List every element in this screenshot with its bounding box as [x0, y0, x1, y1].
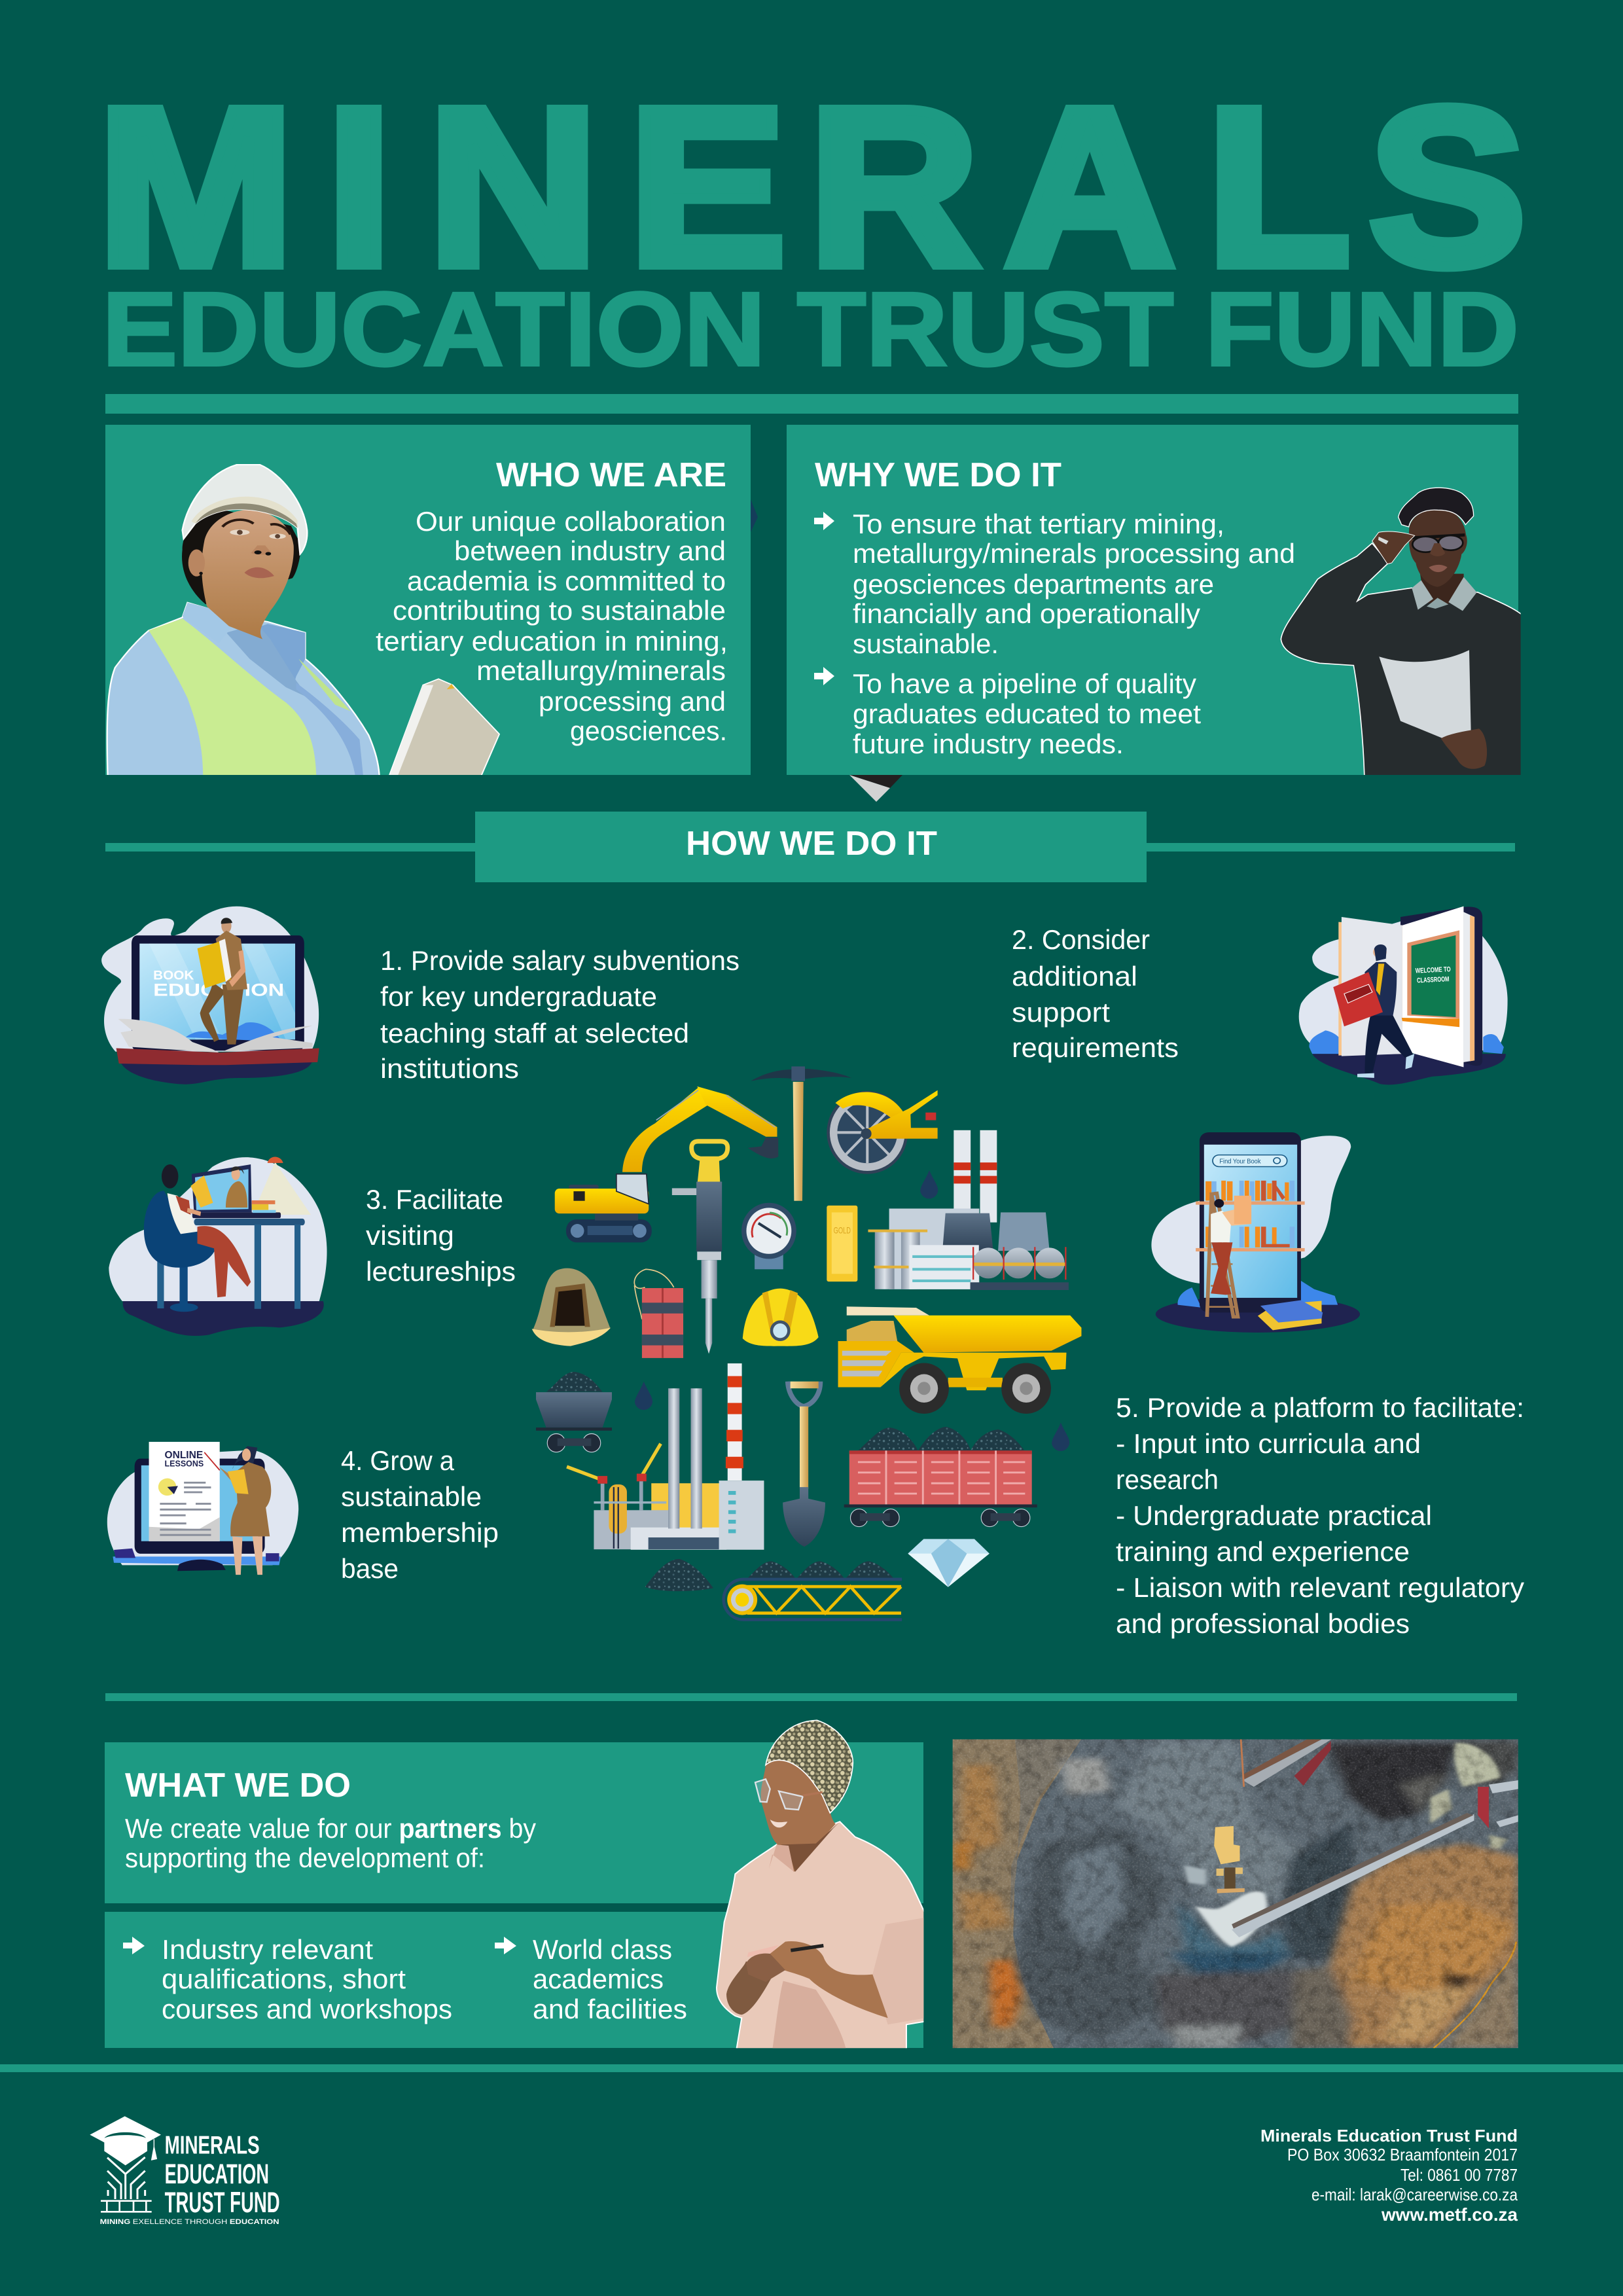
- divider: [105, 1693, 1517, 1701]
- photo: woman in hard hat: [107, 465, 499, 779]
- icon: arrow bullet: [814, 512, 834, 530]
- logo: minerals education trust fund: TRUST FUND: [165, 2187, 280, 2219]
- logo: minerals education trust fund: MINING EXELLENCE THROUGH EDUCATION: [100, 2218, 279, 2226]
- icon: arrow bullet: [814, 667, 834, 685]
- text: who we are body: geosciences.: [570, 715, 727, 746]
- text: step 2: [1012, 924, 1179, 1063]
- illustration: opening book classroom: WELCOME TO: [1415, 966, 1451, 975]
- logo: minerals education trust fund: EDUCATION: [165, 2159, 269, 2190]
- divider: how we do it line: [105, 843, 1515, 852]
- illustration: opening book classroom: CLASSROOM: [1417, 976, 1450, 984]
- text: who we are body: processing and: [539, 686, 726, 717]
- heading panel: how we do it: HOW WE DO IT: [686, 825, 937, 863]
- text: step 4: 4. Grow a: [341, 1445, 455, 1476]
- text: step 2: 2. Consider: [1012, 924, 1150, 955]
- panel: who we are: [105, 425, 758, 779]
- text: step 4: sustainable: [341, 1481, 482, 1512]
- icon: oil drops: [635, 1170, 1069, 1451]
- text: step 5: training and experience: [1116, 1536, 1410, 1567]
- text: what we do intro: We create value for our partners by: [125, 1813, 536, 1844]
- icon: refinery plant: [868, 1130, 1069, 1290]
- text: step 1: 1. Provide salary subventions: [380, 945, 740, 976]
- text: bullet one: geosciences departments are: [853, 569, 1214, 600]
- icon: conveyor belt: [724, 1561, 902, 1620]
- text: industry relevant: Industry relevant: [162, 1934, 373, 1965]
- text: bullet two: To have a pipeline of quality: [853, 668, 1196, 699]
- text: bullet one: To ensure that tertiary mining,: [853, 509, 1224, 539]
- photo: mine aerial view: [953, 1739, 1518, 2048]
- heading: why we do it: WHY WE DO IT: [815, 456, 1061, 494]
- icon: dump truck: [838, 1306, 1081, 1414]
- text: step 3: [366, 1184, 516, 1287]
- text: step 3: lectureships: [366, 1256, 516, 1287]
- text: step 4: [341, 1445, 499, 1584]
- text: step 5: - Liaison with relevant regulatory: [1116, 1572, 1524, 1603]
- illustration: phone library: Find Your Book: [1219, 1158, 1261, 1165]
- illustration: online video lecture: [109, 1157, 327, 1336]
- text: bullet two: graduates educated to meet: [853, 698, 1201, 729]
- illustration: online lessons: ONLINE: [165, 1449, 203, 1460]
- text: step 3: 3. Facilitate: [366, 1184, 503, 1215]
- icon: rail wagon: [844, 1427, 1037, 1527]
- icon: pointer triangle: [849, 775, 902, 802]
- text: step 4: base: [341, 1553, 399, 1584]
- text: who we are body: academia is committed to: [407, 565, 726, 596]
- footer contact details: PO Box 30632 Braamfontein 2017: [1287, 2145, 1518, 2164]
- icon: gold bar: [827, 1206, 857, 1282]
- icon: gold bar: GOLD: [834, 1225, 851, 1236]
- icon: excavator: [555, 1086, 778, 1242]
- text: bullet two: [853, 668, 1201, 759]
- text: industry relevant: [162, 1934, 452, 2024]
- text: industry relevant: qualifications, short: [162, 1964, 406, 1994]
- logo: minerals education trust fund: MINERALS: [165, 2132, 260, 2160]
- heading panel: how we do it: [475, 812, 1147, 882]
- footer contact details: Minerals Education Trust Fund: [1260, 2126, 1518, 2145]
- text: step 2: additional: [1012, 961, 1137, 992]
- icon: yellow loader: [1214, 1826, 1245, 1893]
- text: world class: World class: [533, 1934, 672, 1965]
- title: EDUCATION TRUST FUND: EDUCATION TRUST FUND: [102, 270, 1519, 387]
- text: bullet one: sustainable.: [853, 628, 999, 659]
- illustration: book education: [101, 906, 319, 1085]
- illustration: book education: EDUCATION: [153, 980, 284, 999]
- footer band: [0, 2064, 1623, 2072]
- photo: woman with glasses: [717, 1720, 926, 2051]
- text: bullet one: metallurgy/minerals processing and: [853, 538, 1295, 569]
- text: who we are body: metallurgy/minerals: [476, 655, 726, 686]
- text: who we are body: tertiary education in mining,: [376, 626, 728, 656]
- text: what we do intro: [125, 1813, 536, 1873]
- icon: cutter wheel: [827, 1090, 938, 1174]
- text: step 2: requirements: [1012, 1032, 1179, 1063]
- icon: pneumatic drill: [672, 1141, 728, 1354]
- panel: what we do: [105, 1720, 926, 2051]
- text: who we are body: Our unique collaboration: [416, 506, 726, 537]
- text: who we are body: between industry and: [454, 535, 726, 566]
- footer contact details: Tel: 0861 00 7787: [1400, 2165, 1518, 2185]
- icon: pressure gauge: [741, 1203, 796, 1269]
- photo: man with glasses: [1281, 488, 1523, 779]
- text: step 5: and professional bodies: [1116, 1608, 1410, 1639]
- illustration: phone library: [1151, 1132, 1360, 1333]
- text: world class: [533, 1934, 687, 2024]
- icon: mine entrance: [532, 1268, 611, 1346]
- icon: arrow bullet: [495, 1937, 516, 1954]
- text: step 5: [1116, 1392, 1524, 1639]
- footer contact details: www.metf.co.za: [1381, 2204, 1518, 2225]
- panel: why we do it: [787, 425, 1523, 779]
- text: step 5: 5. Provide a platform to facilitate:: [1116, 1392, 1524, 1423]
- text: who we are body: contributing to sustainable: [393, 595, 726, 626]
- illustration: book education: BOOK: [153, 969, 194, 982]
- illustration: online lessons: LESSONS: [165, 1460, 204, 1469]
- text: world class: and facilities: [533, 1994, 687, 2024]
- footer contact details: e-mail: larak@careerwise.co.za: [1311, 2185, 1518, 2204]
- text: step 4: membership: [341, 1517, 499, 1548]
- text: step 3: visiting: [366, 1220, 454, 1251]
- text: step 1: [380, 945, 740, 1084]
- text: step 5: research: [1116, 1464, 1219, 1495]
- text: bullet one: financially and operationally: [853, 598, 1200, 629]
- icon: diamond: [908, 1539, 990, 1587]
- icon: coal pile: [645, 1559, 713, 1591]
- text: bullet two: future industry needs.: [853, 728, 1124, 759]
- footer contact details: [1260, 2126, 1518, 2225]
- text: industry relevant: courses and workshops: [162, 1994, 452, 2024]
- title: MINERALS: MINERALS: [98, 62, 1526, 312]
- text: step 5: - Undergraduate practical: [1116, 1500, 1432, 1531]
- icon: dynamite: [634, 1269, 683, 1358]
- icon: hard hat: [743, 1289, 819, 1346]
- text: world class: academics: [533, 1964, 664, 1994]
- icon: pickaxe: [751, 1066, 851, 1201]
- illustration: mining equipment cluster: [532, 1066, 1081, 1620]
- text: step 1: for key undergraduate: [380, 981, 657, 1012]
- text: who we are body: [376, 506, 728, 746]
- text: what we do intro: supporting the development of:: [125, 1842, 485, 1873]
- text: step 1: teaching staff at selected: [380, 1018, 689, 1049]
- text: step 1: institutions: [380, 1053, 519, 1084]
- icon: smelter factory: [567, 1363, 764, 1550]
- title divider bar: [105, 394, 1518, 414]
- heading: who we are: WHO WE ARE: [496, 456, 726, 494]
- logo: minerals education trust fund: [90, 2116, 280, 2226]
- icon: ore cart: [536, 1372, 612, 1452]
- illustration: online lessons: [107, 1442, 298, 1575]
- icon: graduation cap: [90, 2116, 161, 2212]
- text: step 2: support: [1012, 997, 1110, 1028]
- heading: what we do: WHAT WE DO: [125, 1767, 351, 1804]
- clipboard: [388, 679, 499, 779]
- illustration: opening book classroom: [1299, 906, 1508, 1085]
- icon: arrow bullet: [123, 1937, 145, 1954]
- text: bullet one: [853, 509, 1295, 659]
- icon: shovel: [783, 1382, 825, 1547]
- text: step 5: - Input into curricula and: [1116, 1428, 1421, 1459]
